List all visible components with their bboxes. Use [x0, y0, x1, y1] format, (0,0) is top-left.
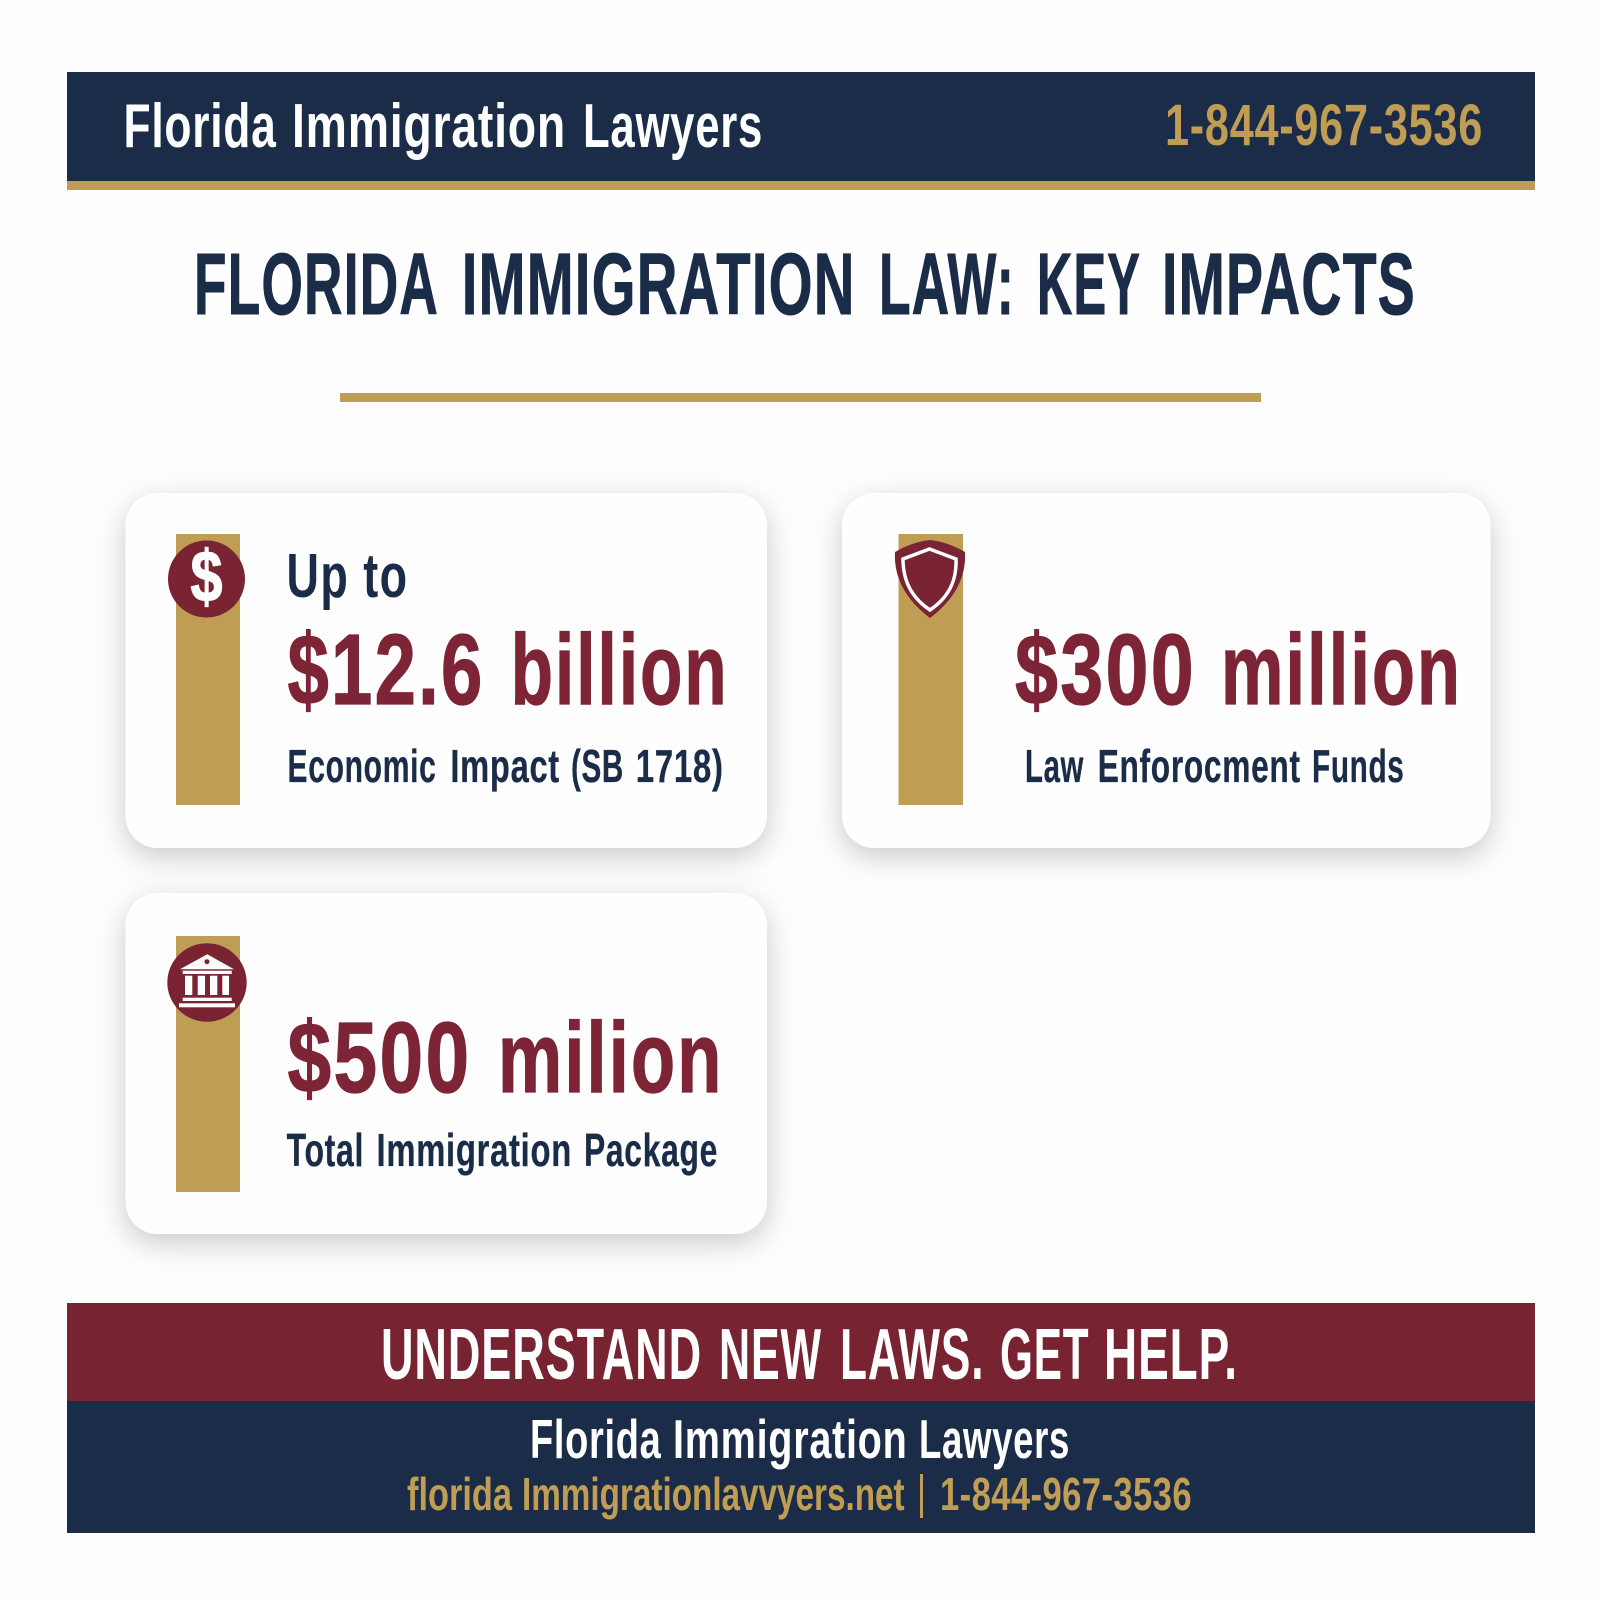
footer firm name: Immigration: [673, 1408, 908, 1470]
footer website and phone: Immigrationlavvyers.net: [522, 1468, 905, 1520]
caption: economic impact: Economic: [288, 740, 436, 792]
caption: economic impact: 1718): [636, 740, 724, 792]
stat: $500 milion: [288, 1002, 724, 1114]
call-to-action heading: GET: [1000, 1315, 1090, 1395]
header phone number: 1-844-967-3536: [1165, 93, 1483, 158]
stat: $300 million: [1015, 614, 1462, 726]
header bar: [67, 72, 1535, 190]
stat: $12.6 billion: [288, 614, 729, 726]
title: FLORIDA: [194, 236, 439, 333]
icon: dollar coin: [168, 537, 245, 618]
footer website and phone: [407, 1468, 1192, 1520]
text: up to: Up to: [286, 542, 408, 611]
caption: economic impact: Impact: [450, 740, 560, 792]
footer call-to-action band: [67, 1303, 1535, 1401]
call-to-action heading: UNDERSTAND: [381, 1315, 702, 1395]
title: LAW:: [879, 236, 1015, 333]
stat: $500 milion: $500: [288, 1002, 472, 1114]
title: IMPACTS: [1162, 236, 1416, 333]
header firm name: [124, 92, 763, 161]
stat: $500 milion: milion: [498, 1002, 724, 1114]
header firm name: Florida: [124, 92, 276, 161]
call-to-action heading: LAWS.: [840, 1315, 984, 1395]
title: IMMIGRATION: [462, 236, 856, 333]
panel: total immigration package: [126, 893, 767, 1234]
caption: economic impact: [288, 740, 724, 792]
footer website and phone: 1-844-967-3536: [940, 1468, 1192, 1520]
caption: total immigration package: [287, 1124, 718, 1176]
icon: dollar coin: $: [190, 537, 222, 617]
header firm name: Immigration: [292, 92, 566, 161]
call-to-action heading: NEW: [719, 1315, 822, 1395]
caption: law enforcement funds: Enforocment: [1098, 740, 1301, 792]
stat: $300 million: $300: [1015, 614, 1196, 726]
caption: economic impact: (SB: [571, 740, 624, 792]
footer firm name: Florida: [530, 1408, 662, 1470]
header firm name: Lawyers: [583, 92, 763, 161]
panel: economic impact: [126, 493, 767, 848]
stat: $12.6 billion: $12.6: [288, 614, 484, 726]
icon: courthouse: [167, 943, 247, 1022]
caption: total immigration package: Package: [584, 1124, 718, 1176]
call-to-action heading: HELP.: [1104, 1315, 1238, 1395]
title: [194, 236, 1416, 333]
title: KEY: [1037, 236, 1141, 333]
footer firm name: [530, 1408, 1070, 1470]
caption: law enforcement funds: Funds: [1312, 740, 1404, 792]
stat: $12.6 billion: billion: [511, 614, 729, 726]
footer firm name: Lawyers: [919, 1408, 1070, 1470]
caption: total immigration package: Total: [287, 1124, 364, 1176]
caption: law enforcement funds: Law: [1025, 740, 1084, 792]
stat: $300 million: million: [1221, 614, 1462, 726]
caption: total immigration package: Immigration: [376, 1124, 572, 1176]
call-to-action heading: [381, 1315, 1238, 1395]
footer website and phone: florida: [407, 1468, 512, 1520]
icon: shield: [895, 540, 965, 618]
footer contact band: [67, 1401, 1535, 1533]
panel: law enforcement funds: [842, 493, 1490, 848]
